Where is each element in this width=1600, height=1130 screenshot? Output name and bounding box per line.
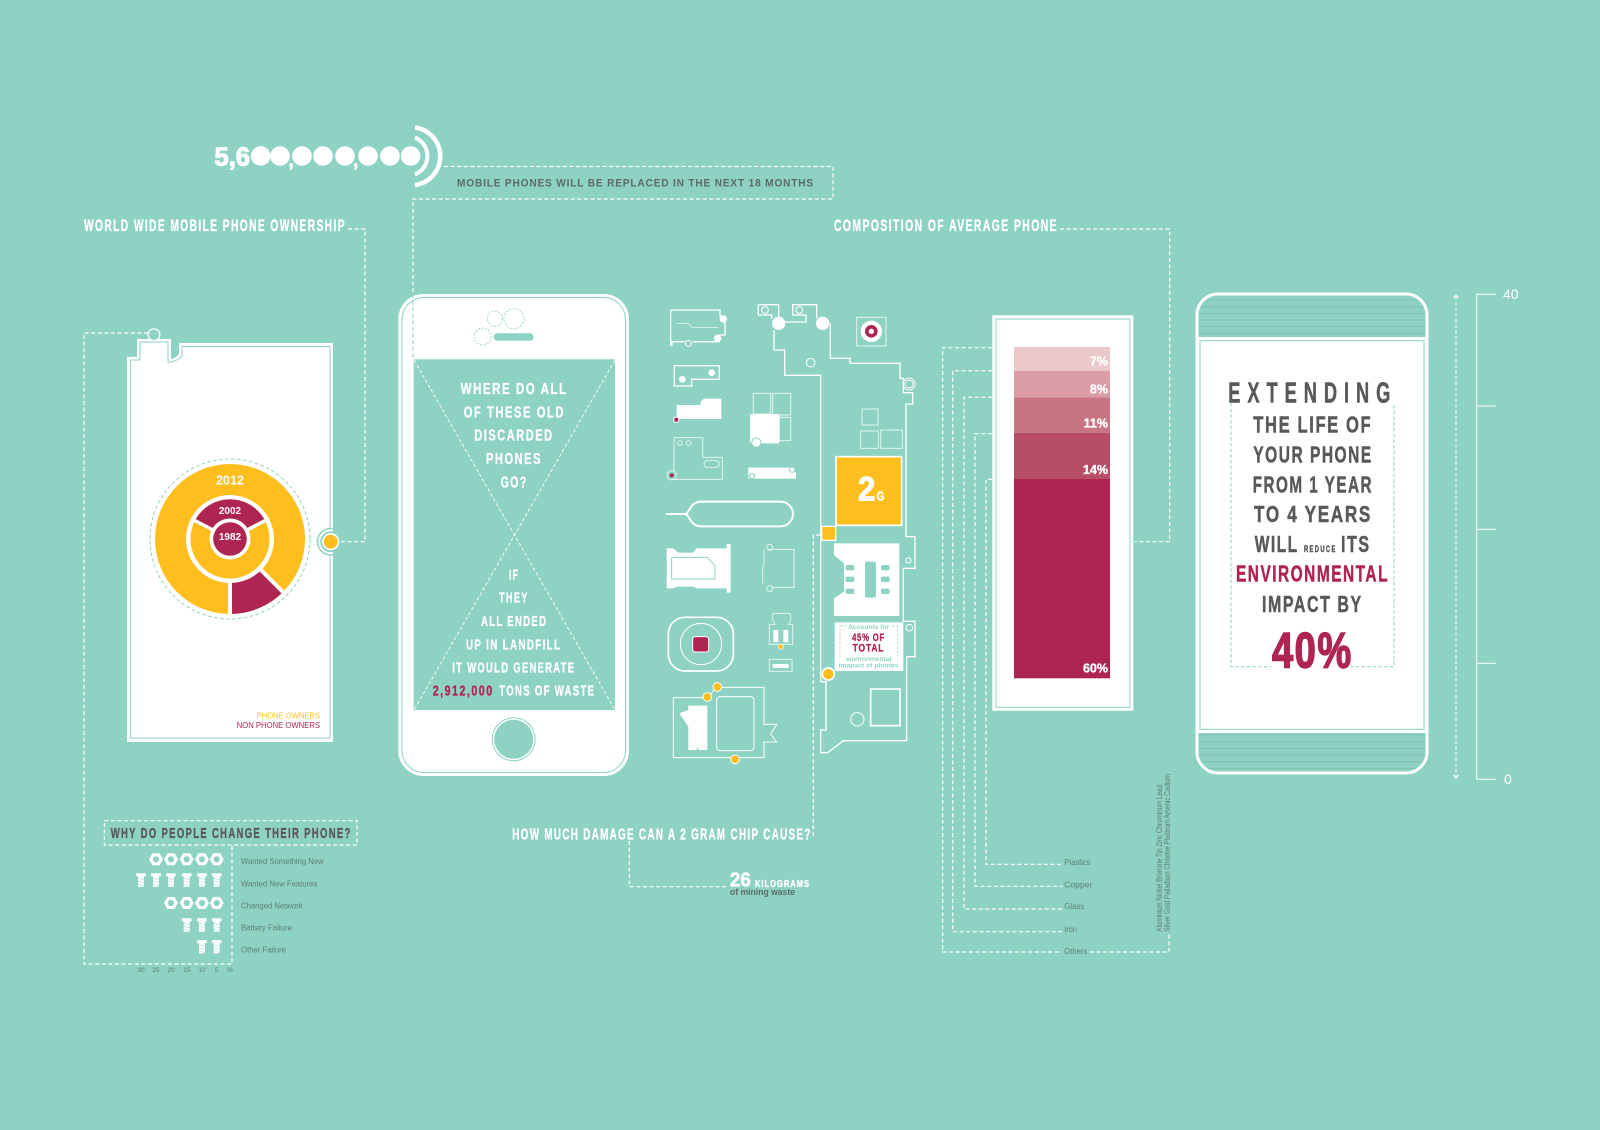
- labels: materials: Plastics: [1064, 858, 1091, 867]
- message text: [1228, 377, 1397, 678]
- scale axis 0 to 40: 0: [1504, 771, 1512, 787]
- part: battery frame: [673, 683, 777, 764]
- panel: composition bar chart: 7%: [1090, 355, 1108, 369]
- pictogram chart: reasons for changing phone: Changed Network: [241, 901, 304, 910]
- scale arrow: [1454, 295, 1458, 778]
- part: thin clip: [763, 544, 794, 592]
- heading: composition of average phone: COMPOSITION OF AVERAGE PHONE: [834, 217, 1058, 235]
- screen: [414, 359, 615, 710]
- message text: YOUR PHONE: [1253, 441, 1373, 467]
- caption: mobile phones replaced: MOBILE PHONES WILL BE REPLACED IN THE NEXT 18 MONTHS: [457, 178, 814, 190]
- home button: [492, 718, 535, 761]
- message text: 40%: [1272, 622, 1353, 678]
- board details: [851, 558, 913, 726]
- pictogram chart: reasons for changing phone: 5: [215, 967, 219, 974]
- part: solid bar: [748, 467, 796, 479]
- dashed text frame: [1231, 403, 1394, 667]
- pictogram chart: reasons for changing phone: 25: [152, 967, 160, 974]
- headline: 5.6 billion number with signal waves: ,: [353, 150, 358, 172]
- message text: WILL: [1255, 531, 1299, 557]
- chip: 2G: 2: [858, 471, 875, 509]
- part: sim socket: [834, 543, 899, 616]
- small yellow square: [822, 526, 836, 540]
- part: home button: [668, 617, 733, 671]
- labels: materials: Glass: [1064, 902, 1084, 911]
- headline: 5.6 billion number with signal waves: 5,6: [214, 142, 250, 172]
- screen text: answer: IF: [509, 566, 519, 583]
- part: connector: [769, 613, 793, 671]
- callout: accounts for 45%: imapact of phones: [839, 663, 899, 670]
- connector dot: [317, 528, 341, 556]
- labels: materials: Copper: [1064, 880, 1093, 890]
- screen text: answer: TONS OF WASTE: [499, 682, 595, 699]
- chip: 2G: G: [877, 489, 884, 504]
- panel: composition bar chart: 8%: [1090, 382, 1108, 396]
- stat: 26 kilograms of mining waste: of mining waste: [730, 887, 795, 897]
- screen text: question: WHERE DO ALL: [461, 381, 568, 398]
- message text: EXTENDING: [1228, 377, 1397, 409]
- pictogram chart: reasons for changing phone: %: [227, 967, 233, 974]
- pictogram chart: reasons for changing phone: Other Failure: [241, 946, 287, 955]
- part: main circuit board outline: [758, 305, 915, 753]
- panel: phone owners device: [127, 329, 341, 742]
- message text: ENVIRONMENTAL: [1236, 561, 1389, 587]
- panel: composition bar chart: 11%: [1084, 417, 1108, 431]
- phone: extending phone life: [1197, 294, 1427, 773]
- screen text: question: DISCARDED: [474, 428, 554, 445]
- stat: 26 kilograms of mining waste: KILOGRAMS: [755, 879, 810, 890]
- pictogram chart: reasons for changing phone: Wanted New Features: [241, 879, 317, 888]
- heading: world wide ownership: WORLD WIDE MOBILE PHONE OWNERSHIP: [84, 217, 346, 235]
- message text: THE LIFE OF: [1253, 412, 1372, 438]
- phone: where do old phones go: [398, 294, 629, 776]
- rotated list: other metals: [1155, 774, 1172, 932]
- message text: TO 4 YEARS: [1254, 501, 1372, 527]
- callout: accounts for 45%: [835, 622, 903, 671]
- leader lines: composition materials: [943, 348, 1169, 952]
- scale axis 0 to 40: [1477, 286, 1519, 787]
- legend: NON PHONE OWNERS: [237, 720, 320, 730]
- rotated list: other metals: Aluminium Nickel Bromine Tin Zinc Chrominum Lead: [1155, 785, 1164, 932]
- chip: 2G: [836, 457, 902, 525]
- pictogram chart: reasons for changing phone: [136, 853, 324, 974]
- exploded phone parts: left column top: [666, 305, 915, 753]
- pictogram chart: reasons for changing phone: 30: [137, 967, 145, 974]
- exploded phone parts: lower section: [667, 543, 913, 764]
- rotated list: other metals: Silver Gold Palladium Chlorine Platinum Arsenic Cadium: [1163, 774, 1172, 932]
- pictogram chart: reasons for changing phone: 15: [183, 967, 191, 974]
- callout: accounts for 45%: TOTAL: [853, 643, 884, 655]
- scale axis 0 to 40: 40: [1503, 286, 1519, 302]
- screen text: answer: ALL ENDED: [481, 613, 547, 630]
- labels: materials: Iron: [1064, 925, 1077, 934]
- panel: composition bar chart: 14%: [1083, 463, 1108, 477]
- headline: 5.6 billion number with signal waves: [214, 128, 440, 185]
- panel: composition bar chart: [992, 315, 1133, 711]
- screen text: question: OF THESE OLD: [464, 404, 565, 421]
- screen text: question: PHONES: [486, 451, 542, 468]
- callout: accounts for 45%: Accounts for: [848, 624, 890, 631]
- part: sim tray: [667, 544, 731, 593]
- legend: [237, 711, 320, 730]
- labels: materials: [1064, 858, 1093, 956]
- donut chart: ownership by year: [150, 459, 310, 619]
- yellow connector dot: [822, 668, 834, 680]
- pictogram chart: reasons for changing phone: Battery Failure: [241, 924, 293, 933]
- camera and speaker: [474, 309, 534, 345]
- screen text: answer: 2,912,000: [433, 682, 494, 699]
- stat: 26 kilograms of mining waste: [730, 869, 810, 897]
- screen text: question: [461, 381, 568, 491]
- screen text: answer: [433, 566, 595, 699]
- donut chart: ownership by year: 2012: [216, 474, 244, 488]
- screen text: answer: IT WOULD GENERATE: [452, 659, 575, 676]
- part: bracket: [671, 310, 727, 346]
- message text: IMPACT BY: [1262, 591, 1363, 617]
- stat: 26 kilograms of mining waste: 26: [730, 869, 751, 892]
- heading: damage of 2 gram chip: HOW MUCH DAMAGE CAN A 2 GRAM CHIP CAUSE?: [512, 826, 812, 843]
- heading box: why people change phone: WHY DO PEOPLE CHANGE THEIR PHONE?: [111, 825, 352, 842]
- part: small plate: [674, 366, 719, 386]
- part: solid shield: [674, 399, 721, 422]
- legend: PHONE OWNERS: [257, 711, 320, 721]
- part: thin plate: [667, 438, 722, 480]
- screen text: answer: THEY: [499, 590, 529, 607]
- message text: REDUCE: [1304, 544, 1337, 554]
- headline: 5.6 billion number with signal waves: ,: [288, 150, 294, 172]
- callout: accounts for 45%: 45% OF: [852, 632, 885, 644]
- message text: FROM 1 YEAR: [1253, 471, 1373, 497]
- part: chip block: [750, 393, 791, 447]
- donut chart: ownership by year: 2002: [219, 506, 242, 517]
- labels: materials: Others: [1064, 947, 1087, 956]
- pictogram chart: reasons for changing phone: 10: [198, 967, 206, 974]
- message text: ITS: [1341, 531, 1371, 557]
- callout: accounts for 45%: environmental: [846, 656, 892, 663]
- pictogram chart: reasons for changing phone: 20: [167, 967, 175, 974]
- part: sim ejector pin: [666, 502, 793, 526]
- pictogram chart: reasons for changing phone: Wanted Something New: [241, 857, 324, 866]
- heading box: why people change phone: [104, 821, 357, 845]
- screen text: answer: UP IN LANDFILL: [466, 636, 561, 653]
- donut chart: ownership by year: 1982: [219, 532, 242, 543]
- screen text: question: GO?: [501, 474, 528, 491]
- part: camera: [857, 317, 886, 346]
- panel: composition bar chart: 60%: [1083, 662, 1108, 676]
